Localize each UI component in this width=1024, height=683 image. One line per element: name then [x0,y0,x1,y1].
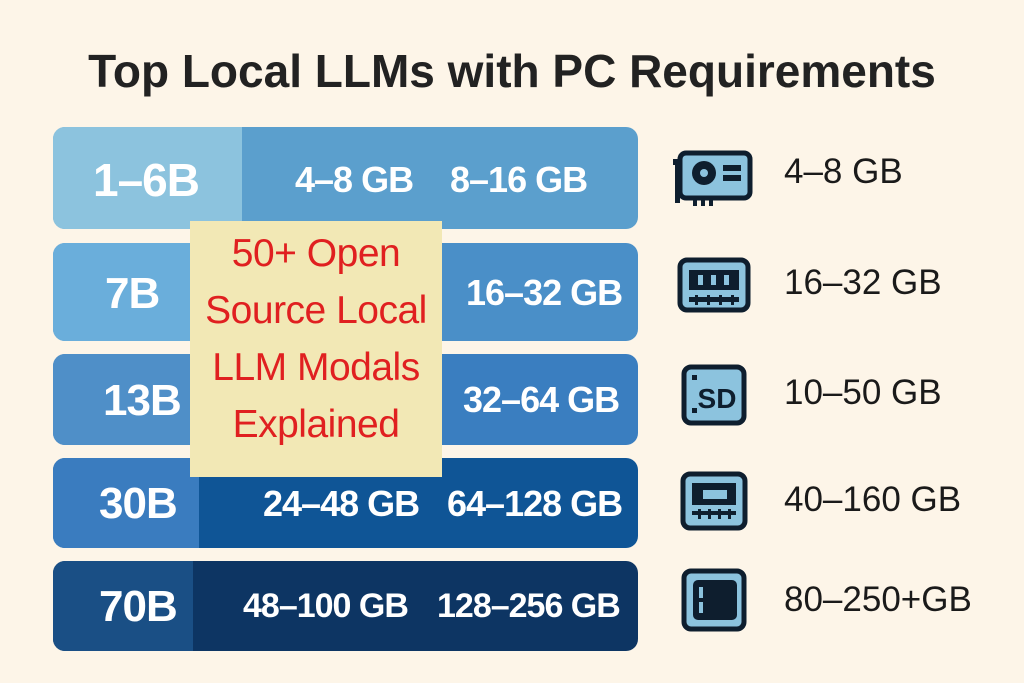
callout: LLM Modals [212,346,420,389]
row 30B: 64–128 GB [447,483,622,524]
row 70B: 70B [99,582,177,631]
row 30B: 24–48 GB [263,483,419,524]
title: Top Local LLMs with PC Requirements [88,45,936,97]
callout: Source Local [205,289,427,332]
label: drive: 80–250+GB [784,580,972,619]
row 7B [53,243,638,341]
callout [190,221,442,477]
row 1-6B: 8–16 GB [450,159,587,200]
icon: ssd [680,472,748,530]
row 7B: 16–32 GB [466,272,622,313]
icon: sd: SD [698,383,736,414]
icon: sd [682,364,746,426]
icon: ram [678,258,750,312]
row 13B: 13B [103,376,181,425]
icon: gpu [673,150,752,206]
row 1-6B [53,127,638,229]
row 30B [53,458,638,548]
label: ram: 16–32 GB [784,263,942,302]
row 1-6B: 1–6B [93,154,199,206]
callout: Explained [233,403,399,446]
row 30B: 30B [99,479,177,528]
callout: 50+ Open [232,232,400,275]
icon: drive [682,568,746,632]
row 70B: 48–100 GB [243,587,408,625]
label: ssd: 40–160 GB [784,480,961,519]
row 1-6B: 4–8 GB [295,159,413,200]
row 70B: 128–256 GB [437,587,620,625]
label: gpu: 4–8 GB [784,152,903,191]
row 13B: 32–64 GB [463,379,619,420]
row 13B [53,354,638,445]
row 7B: 7B [105,269,159,318]
row 70B [53,561,638,651]
label: sd: 10–50 GB [784,373,942,412]
